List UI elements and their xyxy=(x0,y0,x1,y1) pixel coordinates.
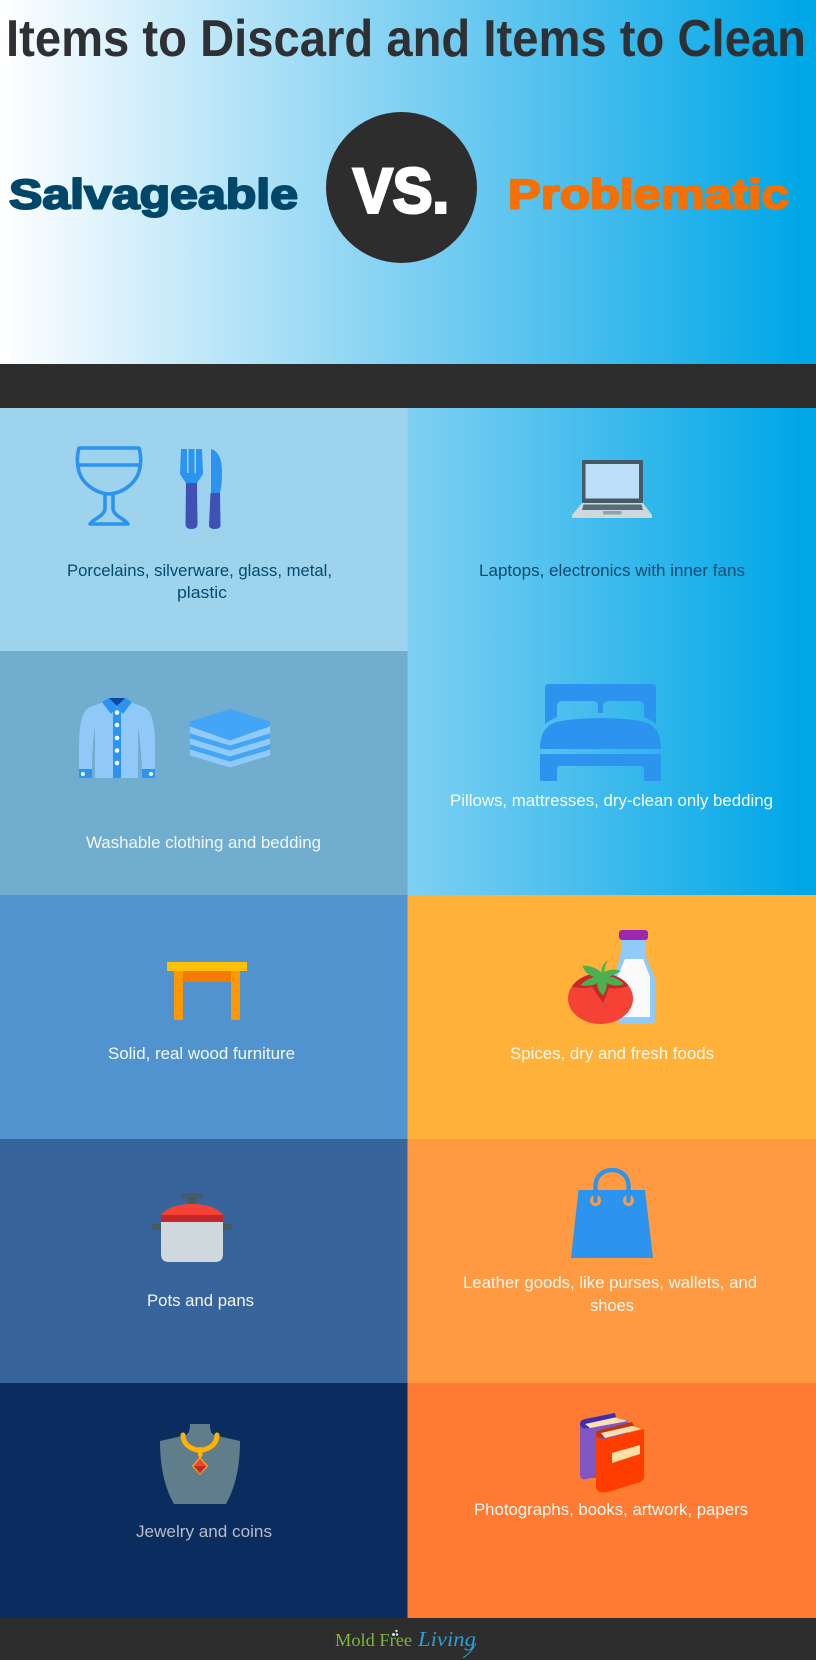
panel: foods xyxy=(408,895,816,1139)
text: foods: Spices, dry and fresh foods xyxy=(510,1044,714,1063)
text: porcelains xyxy=(67,561,332,602)
text: leather goods xyxy=(463,1273,757,1315)
icon: folded bedding xyxy=(190,710,270,767)
text: jewelry: Jewelry and coins xyxy=(136,1522,272,1541)
panel: pots and pans xyxy=(0,1139,408,1383)
dark divider band xyxy=(0,364,816,408)
footer bar xyxy=(0,1618,816,1660)
logo: Mold Free Living xyxy=(335,1627,476,1658)
panel: washable clothing xyxy=(0,651,408,895)
panel: leather goods xyxy=(408,1139,816,1383)
VS badge xyxy=(326,112,477,263)
text: solid wood: Solid, real wood furniture xyxy=(108,1044,295,1063)
icon: shirt xyxy=(79,698,155,778)
icon: wine glass xyxy=(77,448,141,524)
heading: Salvageable: Salvageable xyxy=(9,170,298,218)
text: leather goods: Leather goods, like purses, wallets, and xyxy=(463,1273,757,1292)
icon: books xyxy=(580,1413,644,1492)
icon: table xyxy=(167,962,247,1020)
icon: tomato and bottle xyxy=(568,930,655,1024)
panel: laptops xyxy=(408,408,816,651)
panel: pillows and mattresses xyxy=(408,651,816,895)
text: laptops: Laptops, electronics with inner fans xyxy=(479,561,745,580)
text: porcelains: plastic xyxy=(177,583,228,602)
text: washable clothing: Washable clothing and bedding xyxy=(86,833,321,852)
icon: cooking pot xyxy=(152,1193,232,1262)
logo: Mold Free Living: Mold Free xyxy=(335,1630,412,1650)
text: porcelains: Porcelains, silverware, glass, metal, xyxy=(67,561,332,580)
logo: Mold Free Living: Living xyxy=(417,1627,476,1651)
text: pillows and mattresses: Pillows, mattresses, dry-clean only bedding xyxy=(450,791,773,810)
VS badge: VS. xyxy=(353,156,449,226)
icon: bed xyxy=(540,684,661,781)
text: books and papers: Photographs, books, artwork, papers xyxy=(474,1500,748,1519)
panel: books and papers xyxy=(408,1383,816,1618)
icon: shopping bag xyxy=(571,1170,653,1258)
panel: porcelains xyxy=(0,408,408,651)
panel: solid wood xyxy=(0,895,408,1139)
text: pots and pans: Pots and pans xyxy=(147,1291,254,1310)
icon: laptop xyxy=(572,460,652,518)
icon: necklace on bust xyxy=(160,1424,240,1504)
heading: Problematic: Problematic xyxy=(508,170,789,218)
icon: fork and knife xyxy=(180,449,222,529)
header panel xyxy=(0,0,816,364)
panel: jewelry xyxy=(0,1383,408,1618)
text: leather goods: shoes xyxy=(590,1296,634,1315)
